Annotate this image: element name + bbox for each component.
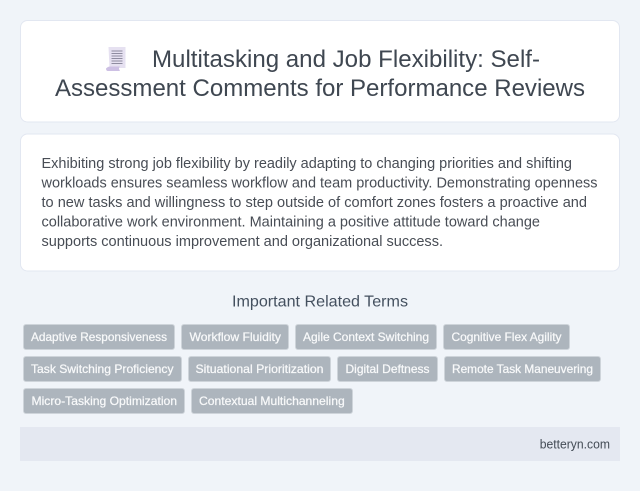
- tag: Contextual Multichanneling: [199, 394, 345, 408]
- tag: Task Switching Proficiency: [31, 362, 174, 376]
- footer source text: betteryn.com: [540, 438, 610, 452]
- tag group: related terms: [24, 324, 600, 414]
- tag: [182, 324, 288, 350]
- tag: [188, 356, 330, 382]
- description text: supports continuous improvement and organizational success.: [42, 234, 443, 250]
- tag: Cognitive Flex Agility: [452, 330, 562, 344]
- tag: Digital Deftness: [346, 362, 430, 376]
- description text: to new tasks and willingness to step outside of comfort zones fosters a proactive and: [42, 195, 587, 211]
- description text: collaborative work environment. Maintaining a positive attitude toward change: [42, 214, 540, 230]
- description text: workloads ensures seamless workflow and team productivity. Demonstrating openness: [40, 176, 598, 192]
- description text: Exhibiting strong job flexibility by readily adapting to changing priorities and shifting: [42, 156, 572, 172]
- tag: Situational Prioritization: [196, 362, 324, 376]
- tag: Adaptive Responsiveness: [31, 330, 167, 344]
- tag: [24, 388, 184, 414]
- footer: [20, 427, 620, 461]
- panel: title header: [20, 20, 620, 122]
- description text: [40, 156, 598, 250]
- tag: [444, 324, 570, 350]
- tag: [296, 324, 436, 350]
- tag: Micro-Tasking Optimization: [32, 394, 177, 408]
- tag: Workflow Fluidity: [190, 330, 281, 344]
- tag: [24, 356, 182, 382]
- icon: document scroll: [106, 47, 126, 71]
- title: Multitasking and Job Flexibility: Self-: [152, 46, 540, 73]
- tag: [192, 388, 352, 414]
- tag: Remote Task Maneuvering: [452, 362, 593, 376]
- title: [55, 46, 585, 102]
- tag: [444, 356, 600, 382]
- panel: description: [20, 134, 620, 271]
- tag: [338, 356, 438, 382]
- title: Assessment Comments for Performance Reviews: [55, 75, 585, 102]
- tag: Agile Context Switching: [303, 330, 429, 344]
- heading: related terms: Important Related Terms: [232, 294, 408, 310]
- tag: [24, 324, 174, 350]
